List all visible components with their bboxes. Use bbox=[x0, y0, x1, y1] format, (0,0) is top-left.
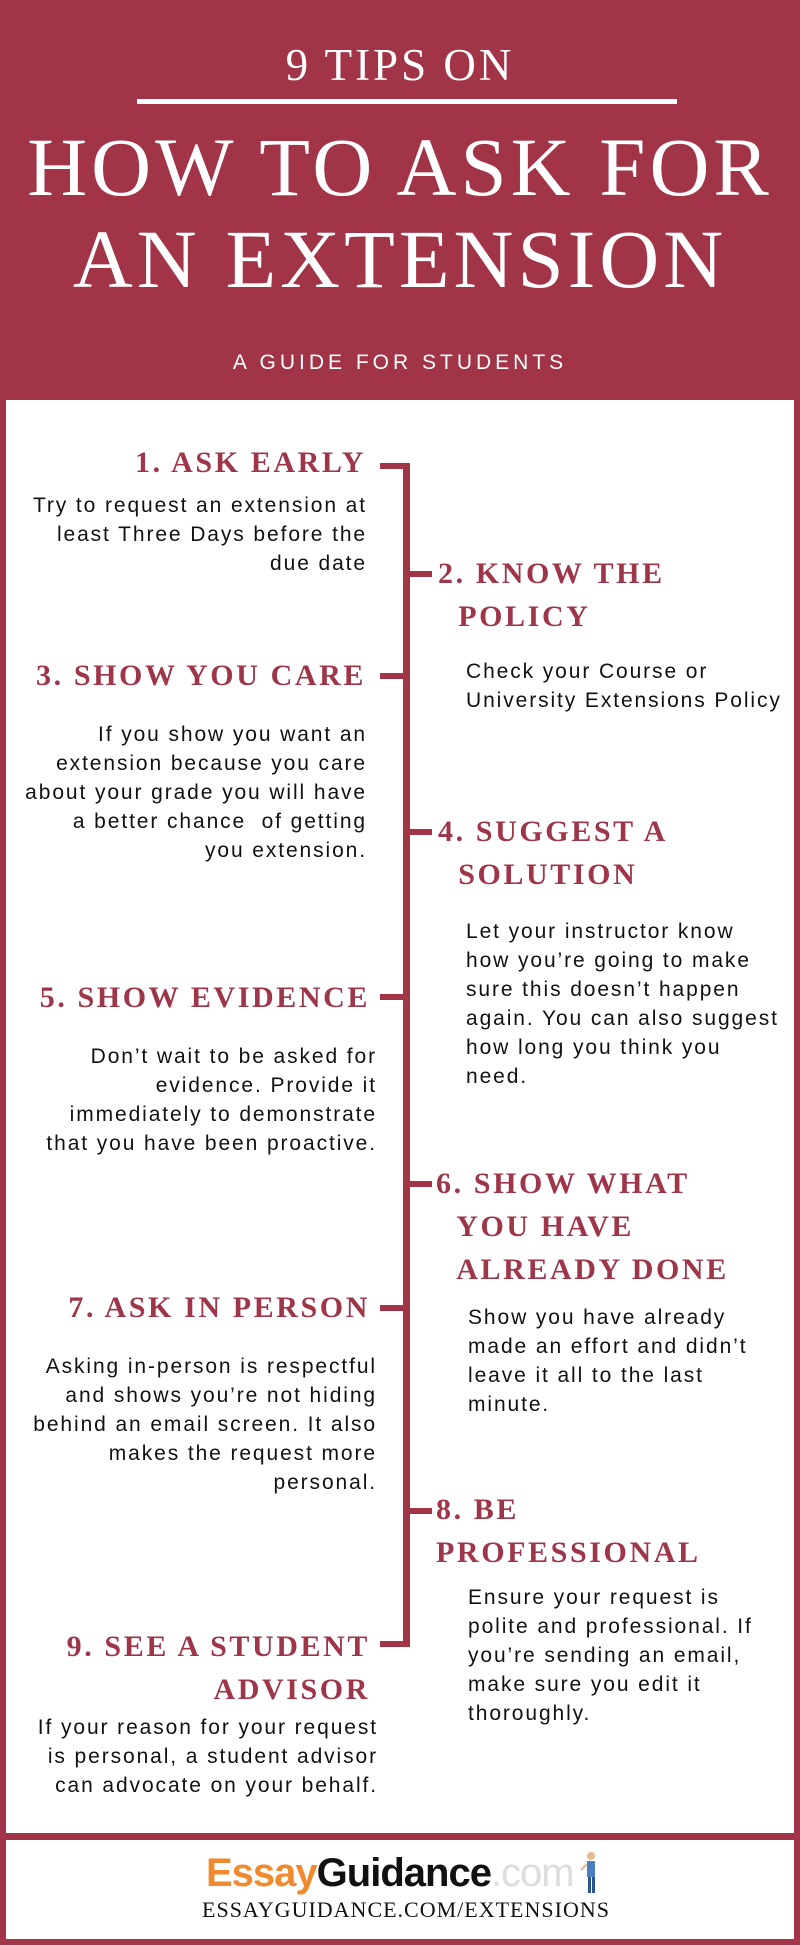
icon: mascot bbox=[580, 1852, 595, 1893]
tip 4 text: need. bbox=[466, 1065, 528, 1088]
tip 7 heading: 7. ASK IN PERSON bbox=[68, 1291, 370, 1324]
footer bbox=[0, 1840, 800, 1945]
tip 8 text: thoroughly. bbox=[468, 1702, 591, 1725]
tip 9 text bbox=[38, 1716, 378, 1797]
tip 9 text: If your reason for your request bbox=[38, 1716, 378, 1739]
title: AN EXTENSION bbox=[73, 213, 727, 305]
tip 3 text: about your grade you will have bbox=[25, 781, 367, 804]
tip 7 text: Asking in-person is respectful bbox=[46, 1355, 377, 1378]
tip 3 text: you extension. bbox=[205, 839, 367, 862]
tip 5 text bbox=[46, 1045, 377, 1155]
tip 9 heading bbox=[67, 1630, 370, 1706]
tip 9 text: is personal, a student advisor bbox=[48, 1745, 378, 1768]
tip 3 text: If you show you want an bbox=[98, 723, 367, 746]
tip 1 text bbox=[33, 494, 367, 575]
tip 5 text: Don’t wait to be asked for bbox=[91, 1045, 377, 1068]
tip 4 text: how you’re going to make bbox=[466, 949, 751, 972]
tip 4 heading: 4. SUGGEST A bbox=[438, 815, 668, 848]
tip 4 heading: SOLUTION bbox=[458, 858, 637, 891]
tip 1 text: Try to request an extension at bbox=[33, 494, 367, 517]
tip 5 text: immediately to demonstrate bbox=[70, 1103, 377, 1126]
tip 4 text: again. You can also suggest bbox=[466, 1007, 779, 1030]
tip 4 text bbox=[466, 920, 779, 1088]
tip 2 text: Check your Course or bbox=[466, 660, 708, 683]
tip 6 heading: 6. SHOW WHAT bbox=[436, 1167, 690, 1200]
tip 4 text: Let your instructor know bbox=[466, 920, 735, 943]
tip 6 text: leave it all to the last bbox=[468, 1364, 704, 1387]
tip 5 text: that you have been proactive. bbox=[46, 1132, 377, 1155]
tip 4 text: how long you think you bbox=[466, 1036, 721, 1059]
tip 3 text: extension because you care bbox=[56, 752, 367, 775]
timeline: vertical line bbox=[403, 463, 410, 1647]
tip 6 text bbox=[468, 1306, 747, 1416]
tip 2 text: University Extensions Policy bbox=[466, 689, 782, 712]
tip 6 heading: ALREADY DONE bbox=[456, 1253, 729, 1286]
tip 3 text bbox=[25, 723, 367, 862]
tip 2 heading bbox=[438, 557, 665, 633]
tip 3 text: a better chance of getting bbox=[73, 810, 367, 833]
tip 2 heading: POLICY bbox=[458, 600, 590, 633]
url: ESSAYGUIDANCE.COM/EXTENSIONS bbox=[202, 1897, 610, 1922]
tip 8 text: make sure you edit it bbox=[468, 1673, 702, 1696]
tip 5 heading: 5. SHOW EVIDENCE bbox=[40, 981, 370, 1014]
tip 2 heading: 2. KNOW THE bbox=[438, 557, 665, 590]
tip 6 text: Show you have already bbox=[468, 1306, 726, 1329]
ticks bbox=[380, 463, 408, 469]
tip 9 heading: ADVISOR bbox=[213, 1673, 370, 1706]
tip 6 text: minute. bbox=[468, 1393, 550, 1416]
tip 8 heading bbox=[436, 1493, 701, 1569]
tip 8 text: polite and professional. If bbox=[468, 1615, 753, 1638]
header banner bbox=[0, 0, 800, 400]
tip 8 text bbox=[468, 1586, 753, 1725]
tagline: A GUIDE FOR STUDENTS bbox=[233, 351, 567, 374]
header rule bbox=[137, 99, 677, 104]
tip 9 heading: 9. SEE A STUDENT bbox=[67, 1630, 370, 1663]
title bbox=[27, 121, 773, 305]
subtitle: 9 tips on: 9 TIPS ON bbox=[286, 40, 514, 90]
tip 6 heading: YOU HAVE bbox=[456, 1210, 634, 1243]
tip 5 text: evidence. Provide it bbox=[156, 1074, 377, 1097]
tip 8 heading: PROFESSIONAL bbox=[436, 1536, 701, 1569]
tip 8 text: Ensure your request is bbox=[468, 1586, 720, 1609]
tip 1 text: due date bbox=[270, 552, 367, 575]
tip 6 heading bbox=[436, 1167, 729, 1286]
tip 4 heading bbox=[438, 815, 668, 891]
tip 1 heading: 1. ASK EARLY bbox=[135, 446, 366, 479]
tip 6 text: made an effort and didn’t bbox=[468, 1335, 747, 1358]
tip 3 heading: 3. SHOW YOU CARE bbox=[36, 659, 366, 692]
tip 1 text: least Three Days before the bbox=[57, 523, 367, 546]
tip 7 text: personal. bbox=[274, 1471, 377, 1494]
tip 7 text: makes the request more bbox=[109, 1442, 377, 1465]
logo: EssayGuidance.com bbox=[206, 1851, 574, 1895]
tip 4 text: sure this doesn’t happen bbox=[466, 978, 740, 1001]
tip 8 text: you’re sending an email, bbox=[468, 1644, 741, 1667]
tip 7 text bbox=[33, 1355, 377, 1494]
tip 7 text: and shows you’re not hiding bbox=[65, 1384, 377, 1407]
tip 8 heading: 8. BE bbox=[436, 1493, 519, 1526]
tip 2 text bbox=[466, 660, 782, 712]
tip 9 text: can advocate on your behalf. bbox=[55, 1774, 378, 1797]
tip 7 text: behind an email screen. It also bbox=[33, 1413, 377, 1436]
panel: tips bbox=[0, 400, 800, 1840]
title: HOW TO ASK FOR bbox=[27, 121, 773, 213]
